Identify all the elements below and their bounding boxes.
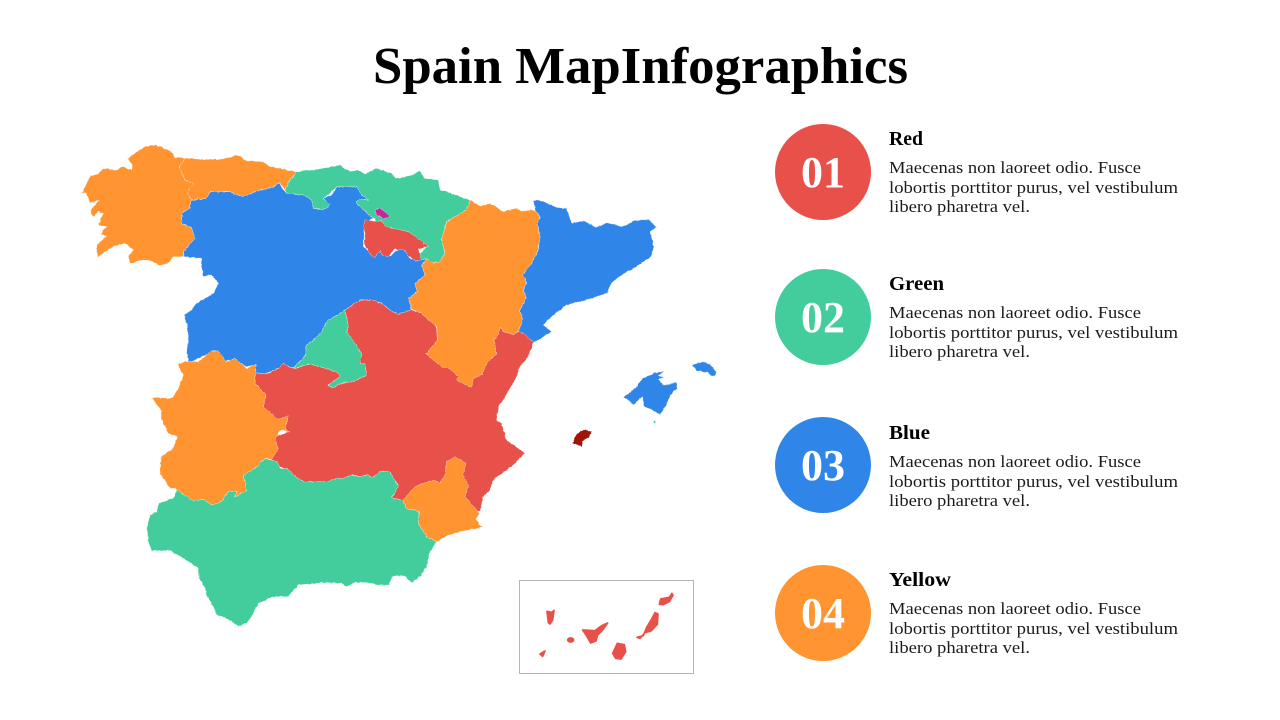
description: Maecenas non laoreet odio. Fusce bbox=[889, 599, 1141, 618]
region: Menorca (blue) bbox=[692, 362, 717, 377]
badge 02 bbox=[775, 269, 871, 365]
region: Ibiza (dark red) bbox=[572, 429, 592, 447]
heading: Blue: Blue bbox=[889, 422, 930, 444]
description bbox=[889, 452, 1178, 510]
region: Castile-La Mancha and Valencia (red) bbox=[255, 300, 533, 512]
region: Andalusia (green) bbox=[147, 458, 437, 627]
region: Castile and Leon (blue) bbox=[182, 183, 427, 373]
description: libero pharetra vel. bbox=[889, 638, 1030, 657]
description bbox=[889, 158, 1178, 216]
islands bbox=[540, 593, 673, 659]
badge 04: 04 bbox=[801, 589, 845, 638]
description: libero pharetra vel. bbox=[889, 491, 1030, 510]
region: Cantabria, Basque Country and Navarre (green) bbox=[285, 165, 470, 263]
description: libero pharetra vel. bbox=[889, 197, 1030, 216]
description: lobortis porttitor purus, vel vestibulum bbox=[889, 472, 1178, 491]
badge 03: 03 bbox=[801, 441, 845, 490]
description: lobortis porttitor purus, vel vestibulum bbox=[889, 619, 1178, 638]
region: Cabrera islet (teal) bbox=[653, 420, 656, 424]
region: Murcia (orange) bbox=[403, 457, 483, 542]
region: La Rioja (red) bbox=[364, 220, 428, 261]
badge 01 bbox=[775, 124, 871, 220]
badge 04 bbox=[775, 565, 871, 661]
description bbox=[889, 599, 1178, 657]
inset: Canary Islands bbox=[520, 580, 694, 674]
description: lobortis porttitor purus, vel vestibulum bbox=[889, 178, 1178, 197]
legend item 02 bbox=[775, 269, 1178, 365]
region: Madrid (green) bbox=[293, 310, 367, 388]
region: Mallorca (blue) bbox=[623, 371, 678, 415]
region: Aragon (orange) bbox=[408, 200, 540, 387]
region: Extremadura (orange) bbox=[152, 351, 290, 505]
badge 01: 01 bbox=[801, 148, 845, 197]
region: Asturias (orange) bbox=[179, 155, 297, 200]
badge 02: 02 bbox=[801, 293, 845, 342]
heading: Red: Red bbox=[889, 128, 923, 150]
legend item 03 bbox=[775, 417, 1178, 513]
map of Spain bbox=[82, 145, 717, 627]
region: Catalonia (blue) bbox=[518, 200, 657, 343]
description: Maecenas non laoreet odio. Fusce bbox=[889, 158, 1141, 177]
heading: Green: Green bbox=[889, 273, 944, 295]
region: Vizcaya enclave (magenta) bbox=[375, 208, 390, 218]
region: Galicia (orange) bbox=[82, 145, 195, 265]
description: libero pharetra vel. bbox=[889, 342, 1030, 361]
badge 03 bbox=[775, 417, 871, 513]
description: lobortis porttitor purus, vel vestibulum bbox=[889, 323, 1178, 342]
legend item 01 bbox=[775, 124, 1178, 220]
heading: Yellow: Yellow bbox=[889, 569, 952, 591]
title: Spain MapInfographics bbox=[373, 38, 908, 95]
description bbox=[889, 303, 1178, 361]
description: Maecenas non laoreet odio. Fusce bbox=[889, 303, 1141, 322]
legend item 04 bbox=[775, 565, 1178, 661]
description: Maecenas non laoreet odio. Fusce bbox=[889, 452, 1141, 471]
